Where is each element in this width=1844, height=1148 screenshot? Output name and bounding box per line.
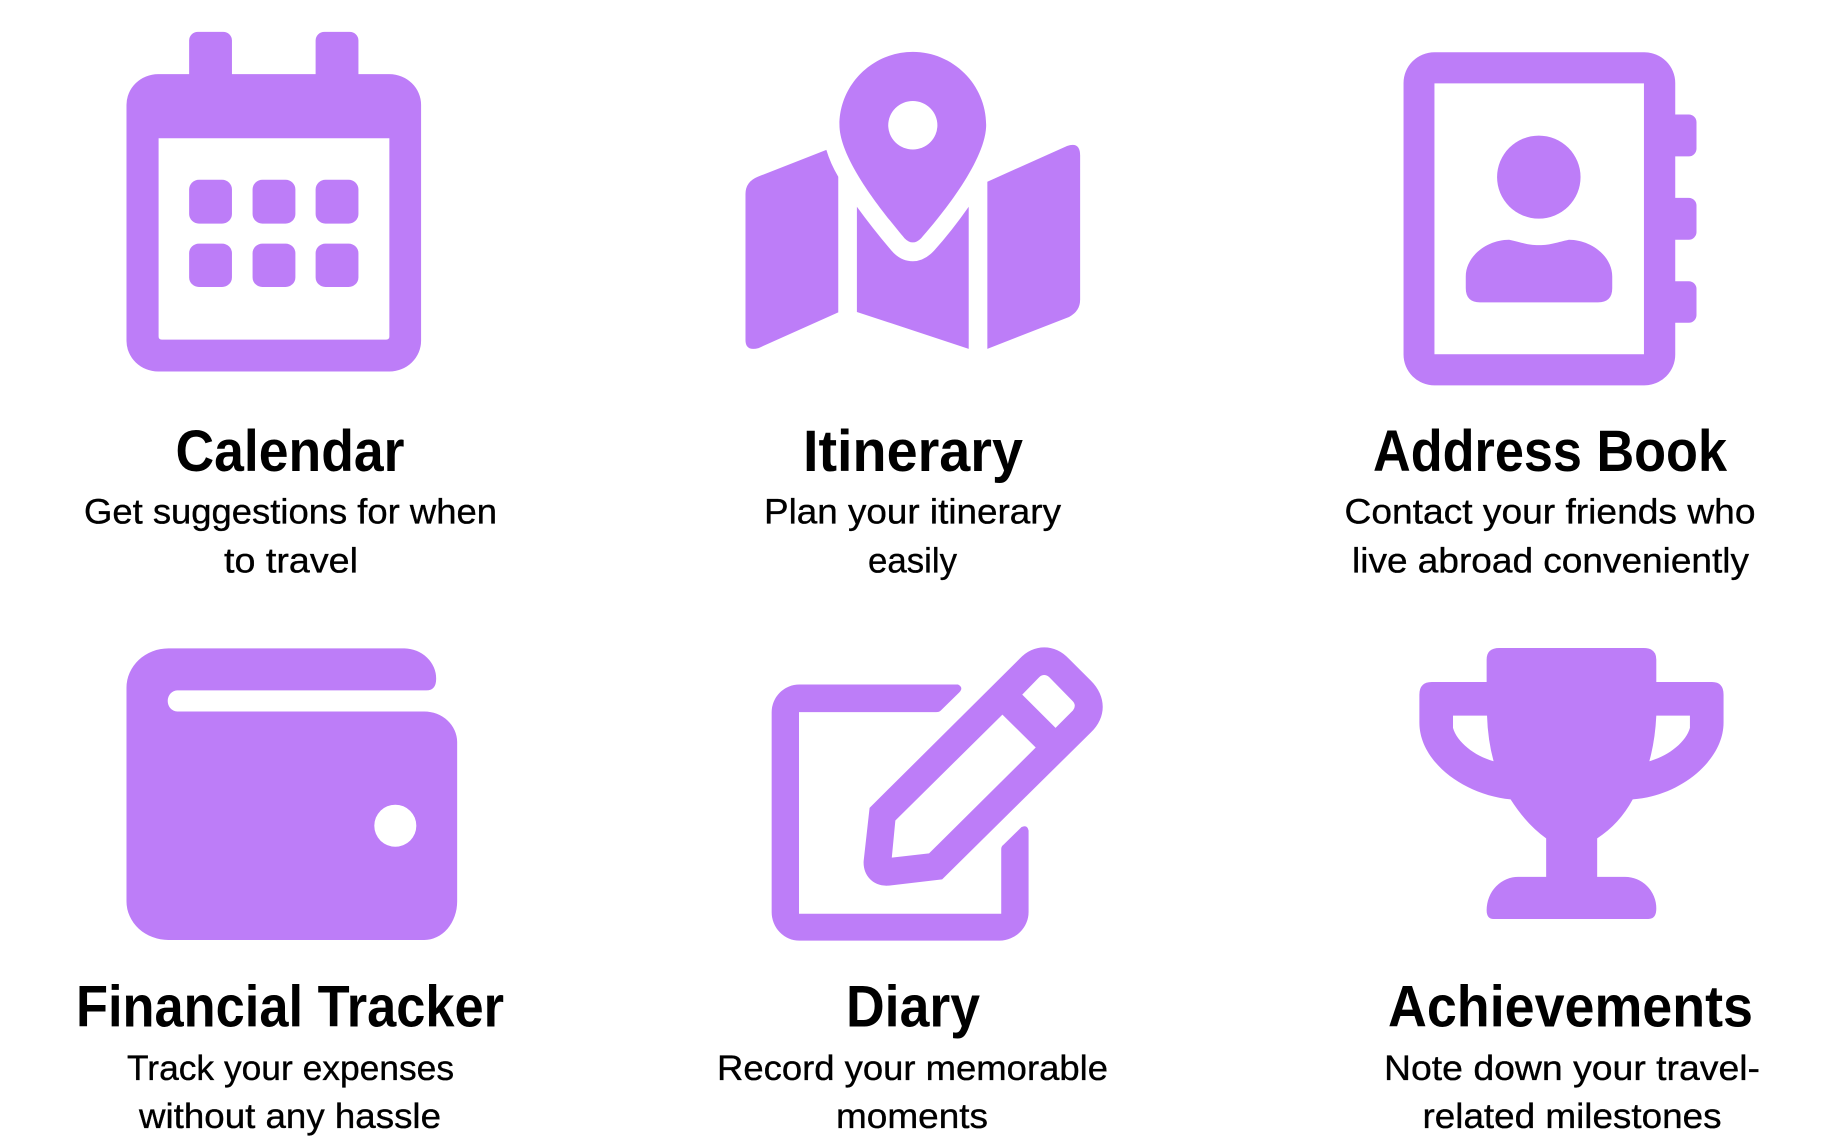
icon: wallet (126, 648, 457, 940)
heading: Itinerary: Itinerary (803, 419, 1023, 484)
text: itinerary description: Plan your itinerary (764, 492, 1062, 532)
panel: calendar (84, 32, 497, 580)
heading: Calendar: Calendar (176, 419, 404, 484)
panel: diary (717, 647, 1108, 1136)
text: financial tracker description: without any hassle (138, 1097, 441, 1136)
panel: address book (1344, 52, 1756, 580)
text: achievements description: Note down your travel- (1384, 1049, 1760, 1088)
text: diary description: Record your memorable (717, 1049, 1108, 1088)
text: address book description (1344, 492, 1756, 580)
heading: Financial Tracker: Financial Tracker (76, 974, 504, 1040)
text: achievements description (1384, 1049, 1760, 1136)
text: address book description: Contact your friends who (1344, 492, 1756, 532)
panel: financial tracker (76, 648, 504, 1136)
heading: Achievements: Achievements (1388, 974, 1753, 1040)
text: financial tracker description: Track your expenses (127, 1049, 454, 1088)
text: calendar description (84, 492, 497, 580)
text: calendar description: Get suggestions for when (84, 492, 497, 532)
icon: trophy (1419, 648, 1724, 919)
text: itinerary description: easily (868, 542, 957, 580)
icon: map with location pin (745, 52, 1080, 349)
heading: Address Book: Address Book (1373, 419, 1728, 484)
panel: itinerary (745, 52, 1080, 580)
heading: Diary: Diary (846, 974, 980, 1040)
text: diary description: moments (836, 1097, 988, 1136)
text: itinerary description (764, 492, 1062, 580)
text: financial tracker description (127, 1049, 454, 1136)
icon: address book (1404, 52, 1697, 385)
text: calendar description: to travel (224, 542, 358, 580)
panel: achievements (1384, 648, 1760, 1136)
text: achievements description: related milestones (1422, 1097, 1722, 1136)
icon: calendar (126, 32, 421, 372)
text: address book description: live abroad conveniently (1352, 542, 1750, 580)
icon: pencil on notepad (772, 647, 1103, 941)
text: diary description (717, 1049, 1108, 1136)
